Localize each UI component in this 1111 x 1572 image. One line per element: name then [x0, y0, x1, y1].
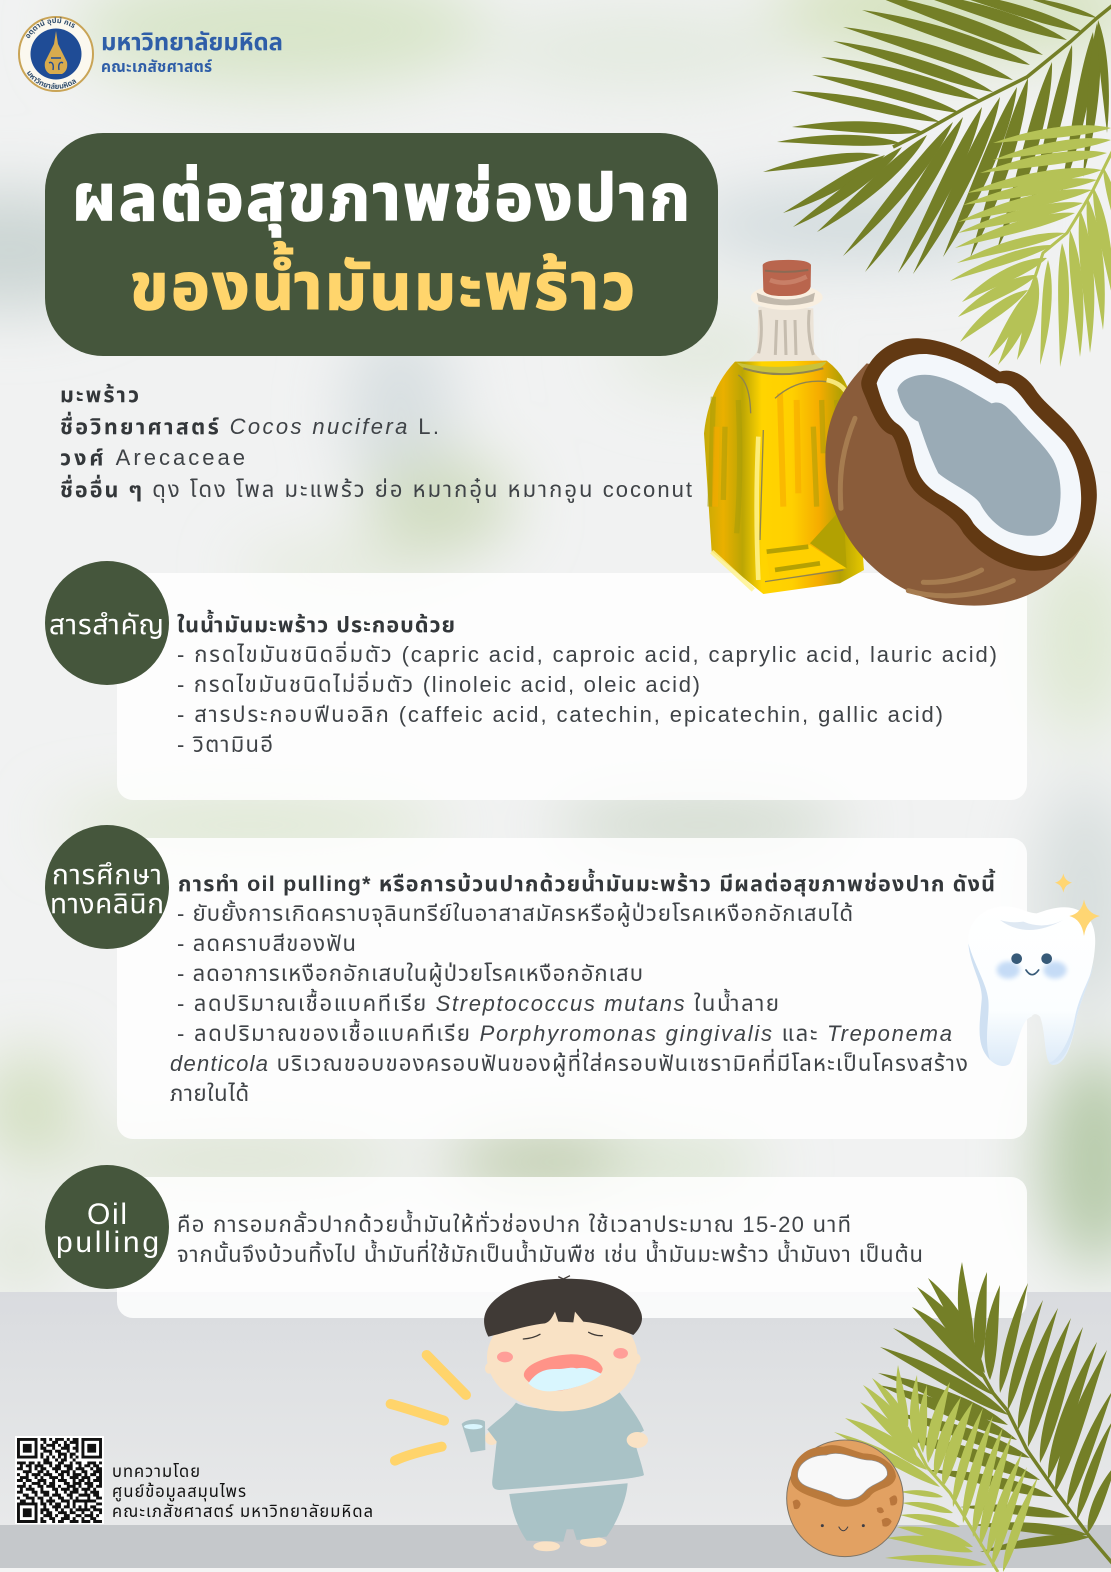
plant info text block: ชื่ออื่น ๆ ดุง โดง โพล มะแพร้ว ย่อ หมากอุ๋น หมากอูน coconut [60, 474, 692, 503]
credit text block: บทความโดย [112, 1463, 200, 1481]
panel text: สารสำคัญ: - กรดไขมันชนิดไม่อิ่มตัว (linoleic acid, oleic acid) [177, 670, 700, 697]
panel text: การศึกษาทางคลินิก: denticola บริเวณขอบของครอบฟันของผู้ที่ใส่ครอบฟันเซรามิคที่มีโลหะเป็นโครงสร้าง [170, 1048, 968, 1077]
badge: การศึกษาทางคลินิก: การศึกษา [52, 859, 162, 890]
panel text: การศึกษาทางคลินิก: การทำ oil pulling* หรือการบ้วนปากด้วยน้ำมันมะพร้าว มีผลต่อสุขภาพช่องปาก ดังนี้ [178, 868, 996, 897]
panel: การศึกษาทางคลินิก background [117, 838, 1027, 1139]
icon: oil bottle [704, 260, 864, 594]
plant info text block: วงศ์ Arecaceae [60, 445, 245, 470]
badge: Oil pulling: pulling [56, 1226, 159, 1259]
panel text: การศึกษาทางคลินิก: - ลดปริมาณของเชื้อแบคทีเรีย Porphyromonas gingivalis และ Treponema [177, 1018, 952, 1046]
panel: สารสำคัญ background [117, 573, 1027, 800]
logo text: university and faculty name [101, 29, 283, 76]
panel text: Oil pulling [177, 1209, 923, 1267]
plant info text block: มะพร้าว [60, 383, 139, 407]
panel text: การศึกษาทางคลินิก: - ลดปริมาณเชื้อแบคทีเรีย Streptococcus mutans ในน้ำลาย [177, 988, 779, 1016]
badge: สารสำคัญ [45, 561, 169, 685]
icon: smiling tooth with sparkles [968, 873, 1100, 1066]
icon: light palm leaf top right [948, 120, 1111, 369]
credit text block [112, 1463, 373, 1521]
title: ของน้ำมันมะพร้าว [130, 241, 635, 323]
QR code [15, 1436, 104, 1524]
panel text: สารสำคัญ [177, 609, 997, 757]
panel text: สารสำคัญ: ในน้ำมันมะพร้าว ประกอบด้วย [177, 609, 455, 637]
icon: dark palm leaf top right [762, 0, 1111, 279]
badge: Oil pulling [45, 1165, 169, 1289]
panel text: การศึกษาทางคลินิก [170, 868, 996, 1106]
icon: light palm leaf bottom right [833, 1365, 1040, 1572]
panel text: การศึกษาทางคลินิก: - ยับยั้งการเกิดคราบจุลินทรีย์ในอาสาสมัครหรือผู้ป่วยโรคเหงือกอักเสบได้ [177, 899, 853, 927]
badge: Oil pulling: Oil [87, 1198, 127, 1231]
logo: Mahidol University seal: มหาวิทยาลัยมหิดล [26, 70, 76, 89]
icon: small smiling coconut [787, 1440, 903, 1557]
panel text: สารสำคัญ: - กรดไขมันชนิดอิ่มตัว (capric acid, caproic acid, caprylic acid, lauric acid) [177, 640, 997, 667]
logo text: university and faculty name: คณะเภสัชศาสตร์ [101, 59, 212, 76]
credit text block: ศูนย์ข้อมูลสมุนไพร [112, 1483, 246, 1501]
plant info text block: ชื่อวิทยาศาสตร์ Cocos nucifera L. [60, 411, 439, 439]
plant info text block [60, 383, 692, 503]
logo text: university and faculty name: มหาวิทยาลัยมหิดล [101, 29, 283, 56]
credit text block: คณะเภสัชศาสตร์ มหาวิทยาลัยมหิดล [112, 1503, 373, 1521]
title [45, 133, 718, 356]
badge: สารสำคัญ: สารสำคัญ [49, 609, 164, 640]
panel text: การศึกษาทางคลินิก: - ลดอาการเหงือกอักเสบในผู้ป่วยโรคเหงือกอักเสบ [177, 961, 643, 987]
title: ผลต่อสุขภาพช่องปาก [72, 161, 690, 237]
logo: Mahidol University seal [18, 16, 94, 92]
floor [0, 1292, 1111, 1572]
illustration: boy rinsing mouth with oil [391, 1276, 648, 1551]
badge: การศึกษาทางคลินิก [45, 825, 169, 949]
panel text: การศึกษาทางคลินิก: - ลดคราบสีของฟัน [177, 931, 356, 956]
panel text: การศึกษาทางคลินิก: ภายในได้ [170, 1081, 249, 1106]
panel text: Oil pulling: จากนั้นจึงบ้วนทิ้งไป น้ำมันที่ใช้มักเป็นน้ำมันพืช เช่น น้ำมันมะพร้าว น้ำมันงา เป็นต้น [177, 1239, 923, 1267]
panel: Oil pulling background [117, 1177, 1027, 1318]
panel text: สารสำคัญ: - วิตามินอี [177, 732, 273, 757]
panel text: สารสำคัญ: - สารประกอบฟีนอลิก (caffeic acid, catechin, epicatechin, gallic acid) [177, 702, 943, 727]
logo: Mahidol University seal: อตฺตานํ อุปมํ กเร [26, 17, 76, 38]
badge: การศึกษาทางคลินิก: ทางคลินิก [50, 888, 164, 919]
icon: coconut half [825, 338, 1097, 606]
panel text: Oil pulling: คือ การอมกลั้วปากด้วยน้ำมันให้ทั่วช่องปาก ใช้เวลาประมาณ 15-20 นาที [177, 1209, 851, 1237]
icon: dark palm leaf bottom right [877, 1262, 1111, 1564]
